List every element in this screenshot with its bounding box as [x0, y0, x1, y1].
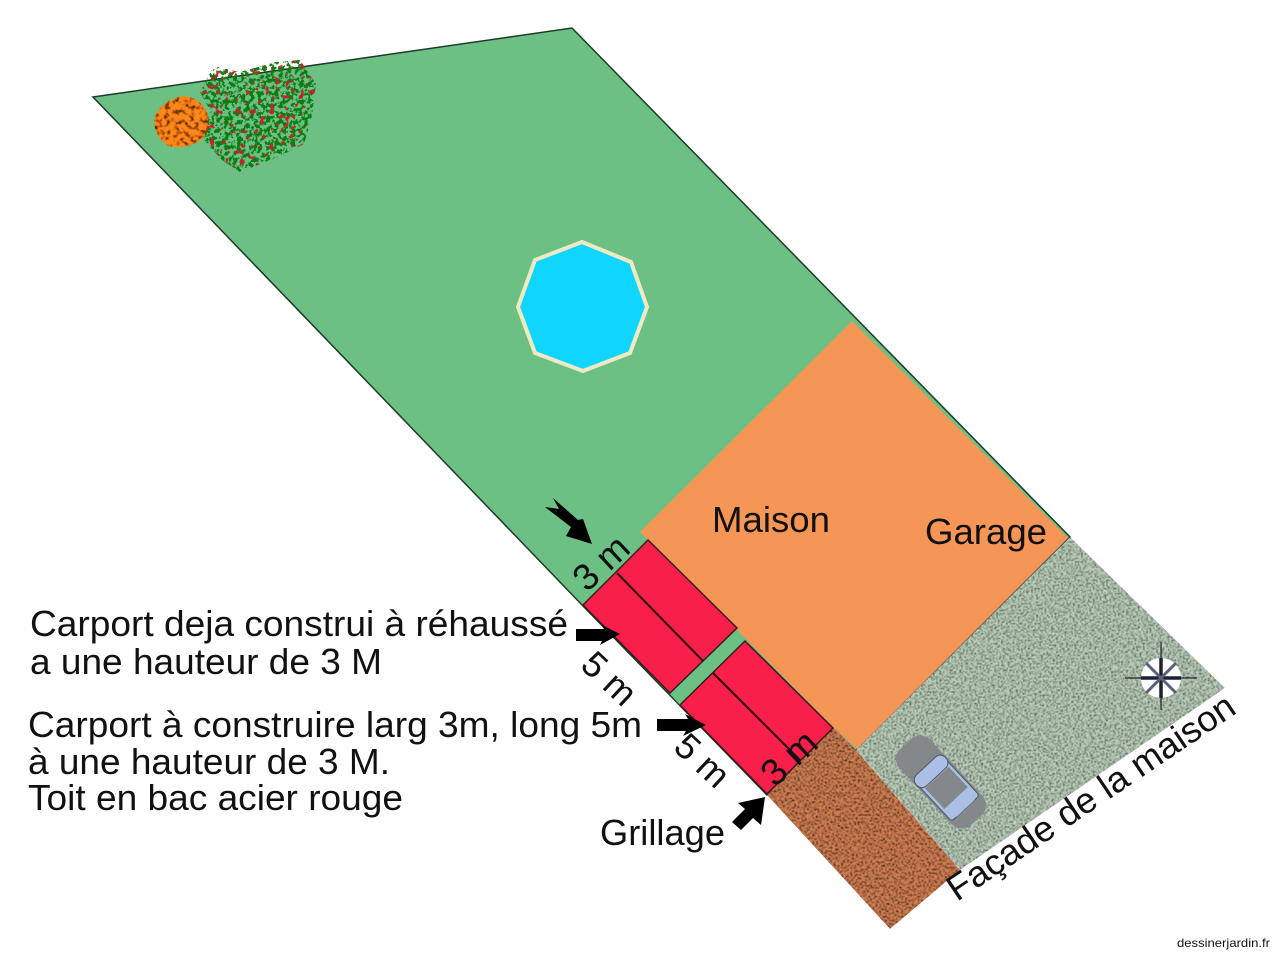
swimming pool: [518, 242, 647, 371]
text block: carport to build: à une hauteur de 3 M.: [28, 741, 390, 782]
label: Garage: Garage: [925, 511, 1047, 552]
carport: to build: [680, 641, 833, 794]
label: façade: Façade de la maison: [939, 685, 1243, 909]
dimension: 3 m top: 3 m: [564, 527, 638, 599]
panel: house and garage: [640, 321, 1068, 749]
label: Maison: Maison: [712, 499, 830, 540]
panel: brown gravel path: [767, 727, 960, 929]
text block: existing carport: Carport deja construi à réhaussé: [30, 603, 568, 644]
panel: lawn plot: [93, 28, 1070, 795]
label: Grillage: Grillage: [600, 812, 725, 853]
arrow: to fence: [732, 797, 765, 830]
watermark: dessinerjardin.fr: [1177, 936, 1270, 950]
icon: compass rose: [1125, 642, 1197, 710]
car: [890, 730, 992, 834]
shrub: green bush with red berries: [200, 60, 316, 172]
dimension: 3 m bottom: 3 m: [752, 722, 826, 794]
green strip between carports: [671, 631, 745, 705]
text block: carport to build: Toit en bac acier rouge: [28, 777, 403, 818]
carport: existing: [583, 540, 737, 693]
text block: existing carport: [30, 603, 568, 682]
text block: existing carport: a une hauteur de 3 M: [30, 641, 382, 682]
panel: gravel forecourt: [856, 537, 1225, 870]
arrow: to 3 m dimension: [545, 498, 592, 544]
arrow: to carport to build: [657, 714, 706, 736]
text block: carport to build: Carport à construire larg 3m, long 5m: [28, 704, 642, 745]
text block: carport to build: [28, 704, 642, 818]
dimension: 5 m existing: 5 m: [574, 643, 645, 714]
shrub: orange bush: [154, 96, 209, 147]
arrow: to existing carport: [576, 625, 620, 645]
dimension: 5 m to build: 5 m: [667, 725, 738, 796]
